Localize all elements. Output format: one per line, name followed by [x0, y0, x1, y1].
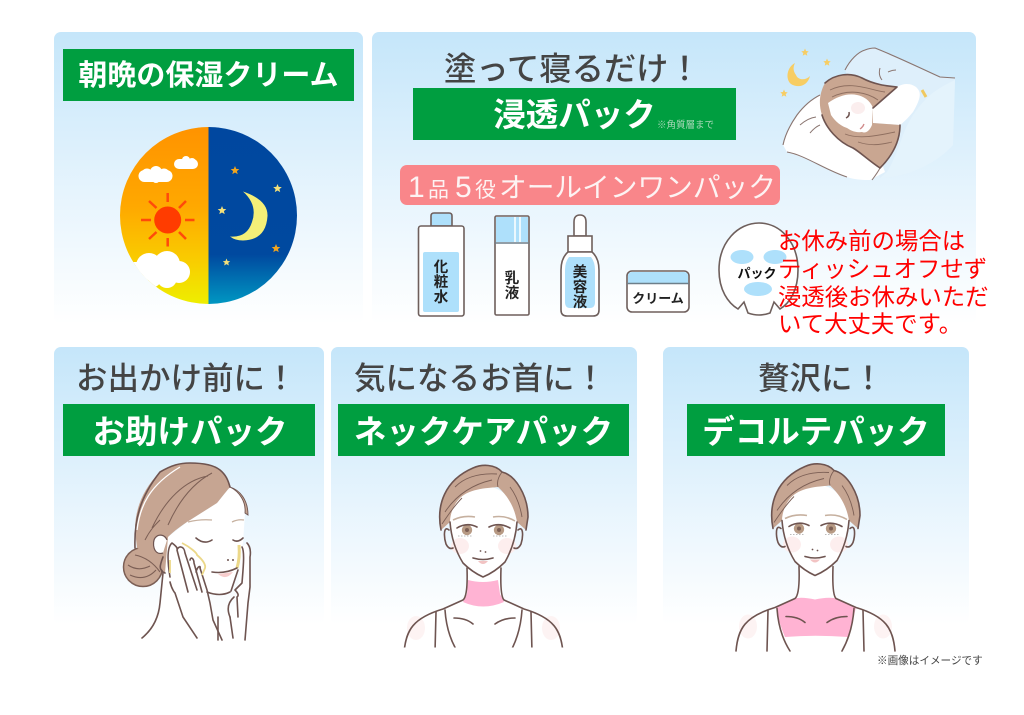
label: one product five roles [400, 165, 780, 205]
heading: before going out: お出かけ前に！ [76, 360, 297, 396]
panel: morning and night cream [54, 32, 363, 324]
heading bar: neck care pack [338, 404, 629, 456]
icon: lotion bottle [418, 213, 464, 316]
note: red text about use before sleep [778, 228, 989, 337]
illustration: woman applying cream to face [124, 463, 250, 640]
heading bar: morning and night cream [63, 49, 354, 101]
panel: helper pack before going out [54, 347, 324, 640]
icon: day and night circle [118, 127, 297, 304]
icon: lotion bottle: 水 [434, 289, 449, 306]
heading bar: helper pack: お助けパック [92, 414, 288, 450]
label: one product five roles: 品 [428, 179, 449, 202]
icon: face mask sheet [719, 223, 798, 315]
icon: face mask sheet: パック [737, 266, 777, 281]
heading: worrying neck: 気になるお首に！ [354, 360, 606, 396]
note: red text about use before sleep: 浸透後お休みいただ [778, 284, 989, 310]
icon: serum dropper bottle [561, 215, 599, 316]
panel: neck care pack [331, 347, 637, 652]
panel: overnight penetration pack [372, 32, 989, 337]
icon: serum dropper bottle: 美 [573, 263, 588, 281]
illustration: woman with pink neck area [404, 465, 563, 652]
heading bar: penetration pack: ※角質層まで [657, 119, 714, 131]
panel: decollete pack [663, 347, 969, 651]
illustration: woman with pink decollete area [736, 464, 895, 651]
icon: serum dropper bottle: 液 [573, 293, 588, 311]
heading bar: penetration pack: 浸透パック [493, 97, 656, 133]
heading bar: decollete pack [687, 404, 945, 456]
heading bar: decollete pack: デコルテパック [702, 413, 930, 450]
heading bar: penetration pack [413, 88, 736, 140]
icon: emulsion bottle: 乳 [505, 270, 520, 287]
icon: lotion bottle: 粧 [434, 273, 449, 291]
heading bar: helper pack [63, 404, 315, 456]
icon: emulsion bottle: 液 [505, 284, 520, 302]
heading bar: neck care pack: ネックケアパック [354, 414, 613, 450]
note: red text about use before sleep: ティッシュオフせず [778, 256, 987, 282]
label: one product five roles: 1 [408, 171, 425, 204]
icon: serum dropper bottle: 容 [573, 279, 588, 296]
heading bar: morning and night cream: 朝晩の保湿クリーム [78, 59, 339, 92]
label: one product five roles: 5 [455, 171, 472, 204]
icon: cream jar [627, 271, 689, 312]
illustration: sleeping woman [780, 48, 955, 180]
note: red text about use before sleep: いて大丈夫です。 [778, 311, 962, 337]
label: one product five roles: オールインワンパック [499, 172, 776, 203]
label: one product five roles: 役 [475, 179, 496, 202]
heading: luxuriously: 贅沢に！ [758, 360, 884, 396]
icon: emulsion bottle [495, 216, 529, 315]
heading: just apply and sleep: 塗って寝るだけ！ [444, 51, 701, 87]
icon: cream jar: クリーム [632, 291, 684, 306]
icon: lotion bottle: 化 [434, 259, 449, 276]
footnote: image is illustrative: ※画像はイメージです [877, 654, 983, 667]
note: red text about use before sleep: お休み前の場合は [778, 228, 965, 254]
